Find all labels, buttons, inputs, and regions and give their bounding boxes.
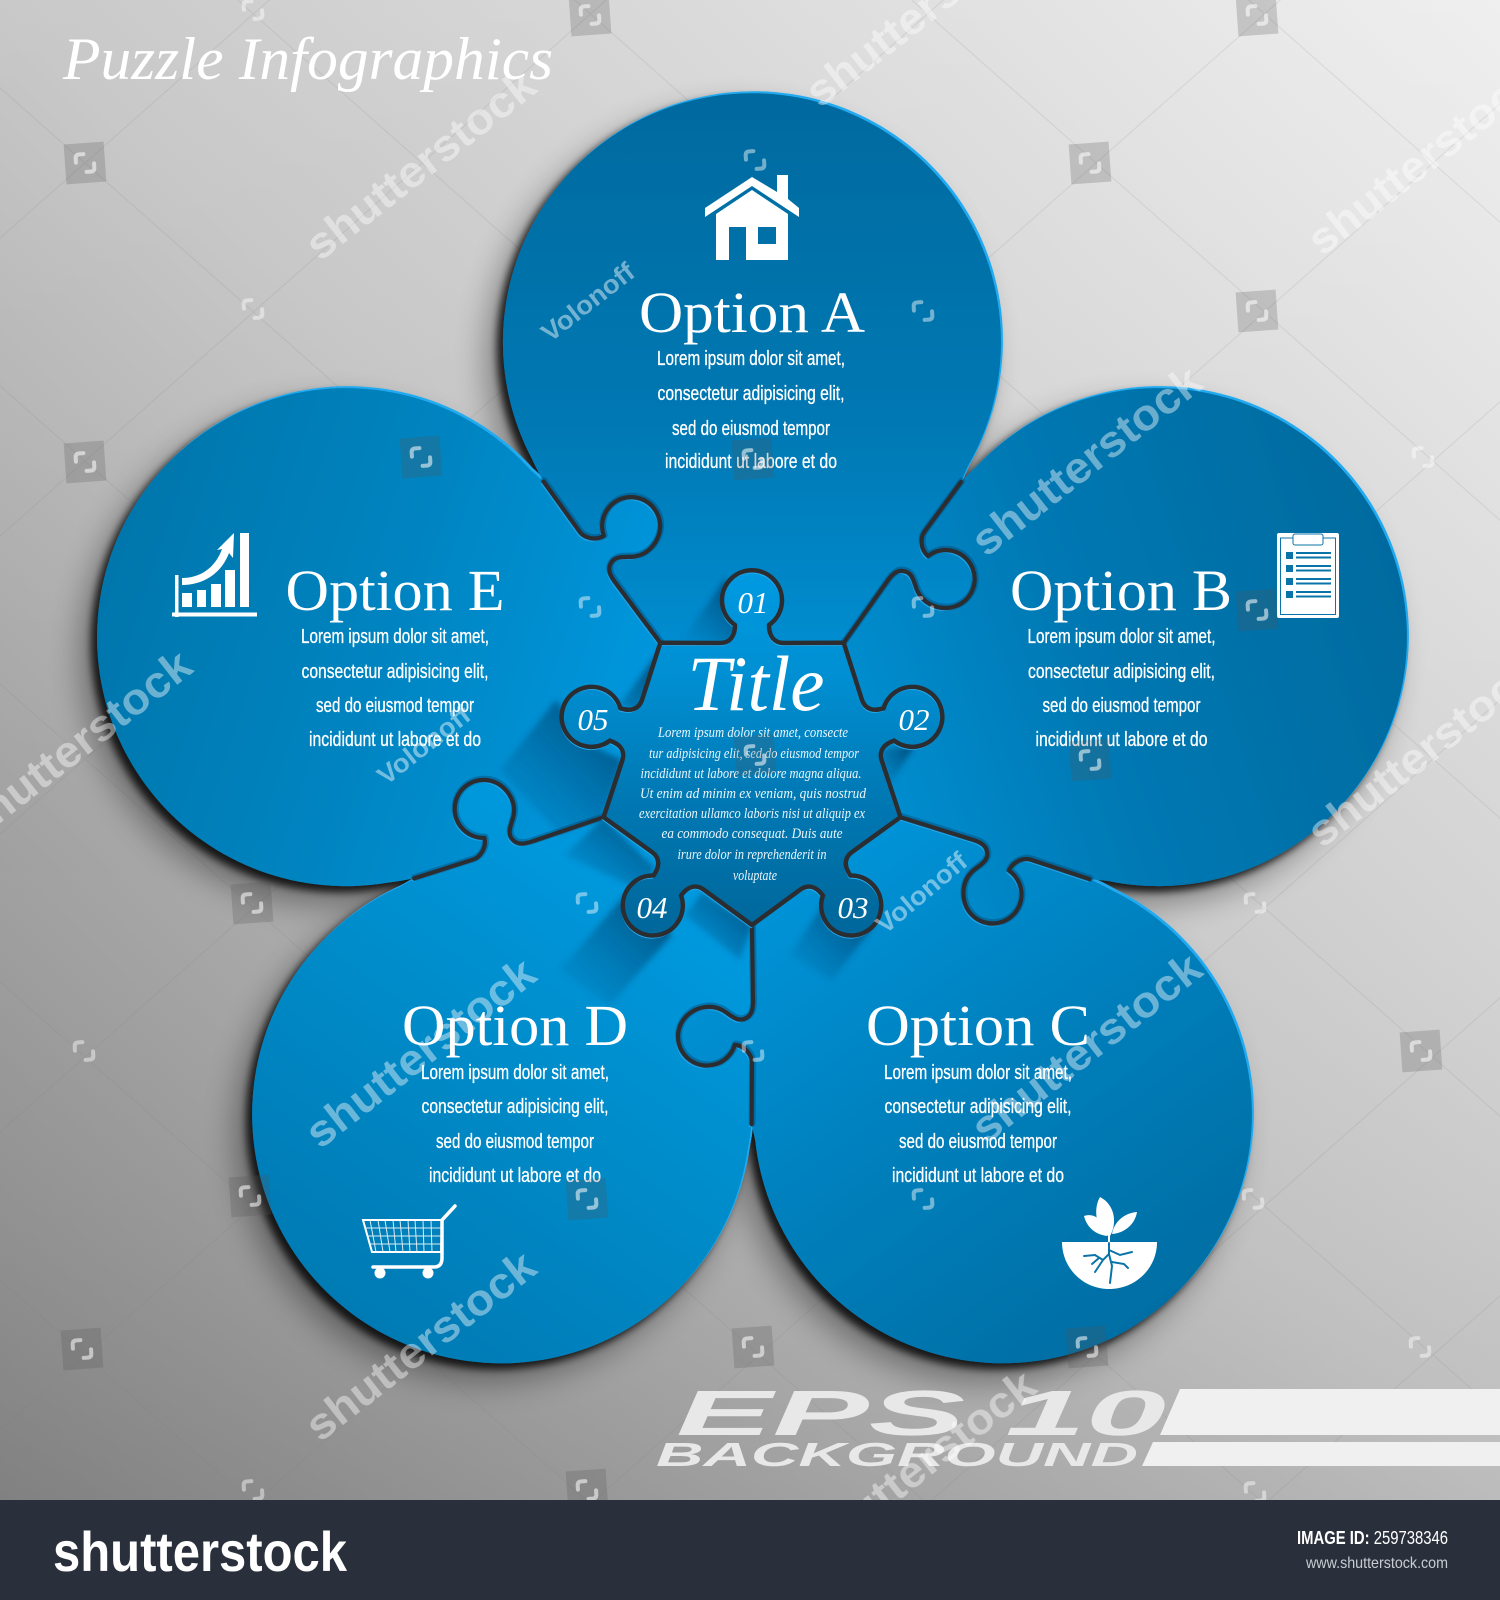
text: option D: Lorem ipsum dolor sit amet,	[421, 1062, 609, 1084]
watermark text: shutterstock	[296, 60, 546, 270]
icon: house	[705, 175, 799, 260]
text: option D	[421, 1062, 609, 1187]
watermark text: shutterstock	[796, 1360, 1046, 1570]
piece: option D	[153, 725, 879, 1462]
step numbers: 01	[738, 585, 768, 620]
panel: option B	[1010, 533, 1339, 751]
text: option D: incididunt ut labore et do	[429, 1165, 601, 1187]
watermark text: shutterstock	[296, 1241, 546, 1451]
heading: option E: Option E	[286, 558, 504, 623]
text: option A	[657, 348, 845, 473]
text: option D: consectetur adipisicing elit,	[422, 1096, 608, 1118]
panel: option E	[172, 533, 504, 751]
site address: www.shutterstock.com	[1305, 1555, 1448, 1572]
text: option E	[301, 626, 489, 751]
text: option A: Lorem ipsum dolor sit amet,	[657, 348, 845, 370]
watermark text: Volonoff	[870, 846, 973, 940]
text: option E: Lorem ipsum dolor sit amet,	[301, 626, 489, 648]
watermark text: Volonoff	[371, 699, 477, 791]
panel: option A	[639, 175, 865, 473]
text: option C: Lorem ipsum dolor sit amet,	[884, 1062, 1072, 1084]
text: option E: sed do eiusmod tempor	[316, 695, 474, 717]
centre text: Ut enim ad minim ex veniam, quis nostrud	[640, 786, 867, 802]
panel: option D	[363, 993, 628, 1278]
text: option E: incididunt ut labore et do	[309, 729, 481, 751]
text: option E: consectetur adipisicing elit,	[302, 661, 488, 683]
icon: shopping cart	[363, 1206, 455, 1278]
centre text: incididunt ut labore et dolore magna aliqua.	[640, 766, 862, 782]
watermark text: Volonoff	[535, 256, 641, 348]
text: option B: consectetur adipisicing elit,	[1028, 661, 1215, 683]
text: option A: incididunt ut labore et do	[665, 451, 837, 473]
step numbers: 03	[838, 890, 868, 925]
text: option D: sed do eiusmod tempor	[436, 1131, 594, 1153]
text: option C	[884, 1062, 1072, 1187]
text: option B: incididunt ut labore et do	[1036, 729, 1208, 751]
centre piece	[561, 570, 942, 938]
step numbers	[578, 585, 930, 925]
icon: plant with roots	[1062, 1197, 1157, 1289]
long shadows cast by the centre piece	[500, 578, 915, 1005]
heading: option C: Option C	[866, 993, 1090, 1058]
text: option C: sed do eiusmod tempor	[899, 1131, 1057, 1153]
icon: rising bar chart	[172, 533, 257, 617]
centre text: Lorem ipsum dolor sit amet, consecte	[657, 725, 848, 741]
text: option C: consectetur adipisicing elit,	[884, 1096, 1072, 1118]
piece: option E	[32, 323, 709, 967]
centre text: ea commodo consequat. Duis aute	[662, 826, 843, 842]
text: option A: sed do eiusmod tempor	[672, 418, 830, 440]
watermark text: shutterstock	[962, 356, 1212, 566]
text: option A: consectetur adipisicing elit,	[658, 383, 844, 405]
centre text: exercitation ullamco laboris nisi ut aliquip ex	[639, 806, 865, 822]
heading: option A: Option A	[639, 280, 865, 345]
step numbers: 02	[898, 702, 930, 737]
heading: option D: Option D	[402, 993, 628, 1058]
EPS 10 background badge: BACKGROUND	[656, 1436, 1138, 1473]
text: option B	[1028, 626, 1216, 751]
text: option B: Lorem ipsum dolor sit amet,	[1028, 626, 1216, 648]
centre text: irure dolor in reprehenderit in	[678, 847, 826, 863]
piece: option B	[795, 323, 1472, 967]
footer bar	[0, 1500, 1500, 1600]
panel: option C	[866, 993, 1157, 1289]
step numbers: 05	[578, 702, 608, 737]
piece: option C	[625, 725, 1351, 1462]
image id: IMAGE ID: 259738346	[1297, 1528, 1448, 1548]
EPS 10 background badge: EPS 10	[676, 1377, 1166, 1449]
centre text: tur adipisicing elit, sed do eiusmod tempor	[649, 746, 859, 762]
EPS 10 background badge	[656, 1377, 1500, 1473]
step numbers: 04	[636, 890, 668, 925]
piece: option A	[503, 93, 1001, 643]
footer logo: shutterstock	[53, 1520, 348, 1583]
heading: option B: Option B	[1010, 558, 1232, 623]
text: option C: incididunt ut labore et do	[892, 1165, 1064, 1187]
centre text	[639, 725, 867, 884]
centre heading: Title	[688, 640, 824, 727]
centre text: voluptate	[733, 868, 777, 884]
watermark text: shutterstock	[962, 943, 1212, 1153]
text: option B: sed do eiusmod tempor	[1042, 695, 1201, 717]
icon: clipboard	[1277, 533, 1339, 618]
seams between the pieces	[402, 468, 1094, 1134]
title: Puzzle Infographics	[62, 26, 553, 92]
watermark text: shutterstock	[296, 948, 546, 1158]
